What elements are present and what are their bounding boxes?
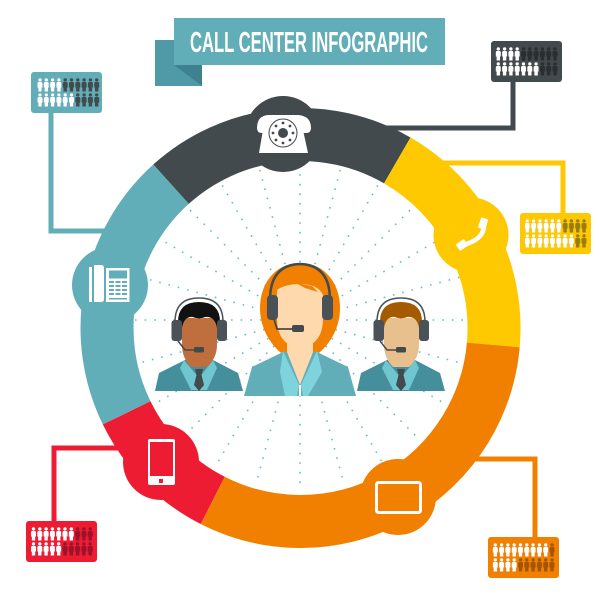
radial dotted lines [135,155,465,485]
title ribbon [155,18,445,86]
connector: dark [385,78,513,128]
person: right agent [357,298,445,391]
icon: tablet [360,459,436,535]
stat box: red [26,521,97,562]
icon: desk phone [72,247,148,323]
icon: handset [434,198,508,272]
ring segment: teal [107,184,171,413]
ring segment: red [127,413,213,500]
stat box: yellow [520,213,591,254]
ring segment: dark [171,134,397,184]
connector: red [54,448,130,524]
person: center agent [244,263,356,396]
icon: mobile phone [123,424,199,500]
ring [107,134,494,521]
icon: rotary telephone [245,96,321,172]
connector: orange [420,459,535,540]
connector: yellow [430,163,563,216]
ring segment: orange [213,345,493,521]
title: CALL CENTER INFOGRAPHIC [190,27,428,59]
ring segment: yellow [397,160,494,345]
connector: teal [51,110,110,231]
stat box: orange [488,537,559,578]
stat box: dark [491,41,562,82]
stat box: teal [31,72,102,113]
person: left agent [155,298,243,391]
